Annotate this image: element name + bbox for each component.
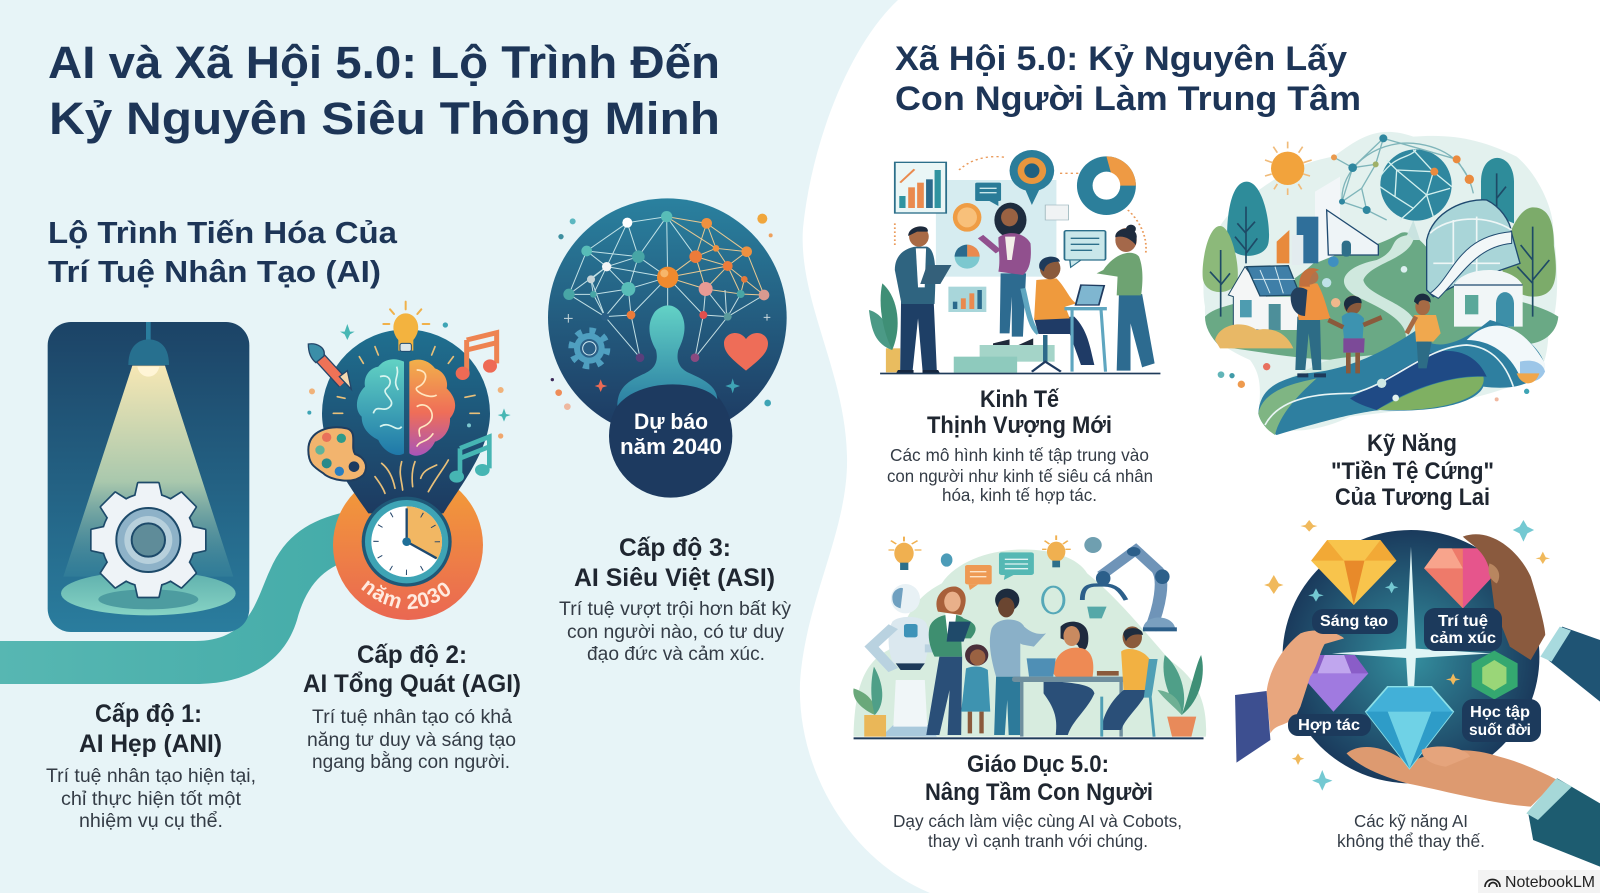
- forecast circle: [609, 374, 732, 498]
- text: education: Giáo Dục 5.0:: [967, 751, 1109, 778]
- label: năm 2030 on arc: năm 2030: [361, 580, 450, 610]
- badge: NotebookLM: NotebookLM: [1505, 874, 1595, 891]
- text: level 3: AI Siêu Việt (ASI): [574, 564, 775, 592]
- lamp: [128, 322, 169, 365]
- label: forecast 2040: Dự báo: [634, 409, 708, 434]
- illustration: level 3 ASI network head: [548, 198, 787, 498]
- teal roadmap ribbon: [0, 512, 345, 684]
- badge: NotebookLM: [1478, 870, 1600, 893]
- panel: level 1 spotlight and gear: [48, 322, 249, 632]
- spark lines: [333, 347, 479, 493]
- text: level 3: Trí tuệ vượt trội hơn bất kỳ: [559, 599, 792, 620]
- ground line: [880, 373, 1160, 374]
- skill label: Học tập suốt đời: Học tập: [1470, 704, 1530, 721]
- sparkles: [307, 322, 511, 439]
- text: future skills heading: Của Tương Lai: [1335, 484, 1490, 511]
- circular cycle icon: [1077, 156, 1136, 215]
- center sparkle: [1332, 547, 1492, 740]
- people walking: [1291, 268, 1441, 377]
- top right hand: [1463, 534, 1600, 702]
- text: economy: Các mô hình kinh tế tập trung vào: [890, 445, 1149, 465]
- icon: gear: [572, 331, 607, 366]
- gear speech bubble: [1010, 150, 1054, 205]
- text: economy: Kinh Tế: [980, 386, 1060, 413]
- icon: brain: [357, 359, 455, 456]
- skill label: Trí tuệ cảm xúc: [1424, 608, 1502, 651]
- skill label: Hợp tác: Hợp tác: [1298, 717, 1360, 734]
- river and waves: [1258, 320, 1545, 435]
- icon: orange music note: [456, 333, 497, 380]
- heading: Society 5.0: Xã Hội 5.0: Kỷ Nguyên Lấy: [895, 40, 1347, 78]
- icon: gear: [92, 483, 205, 597]
- green backdrop: [854, 549, 1206, 737]
- illustration: level 2 AGI head and clock: [307, 302, 511, 620]
- section heading: AI evolution: Trí Tuệ Nhân Tạo (AI): [48, 254, 381, 289]
- bottom right hand: [1347, 747, 1600, 867]
- light beam: [63, 366, 233, 577]
- globe network: [1331, 134, 1474, 240]
- hills: [1205, 232, 1558, 363]
- text: level 2: năng tư duy và sáng tạo: [307, 730, 516, 751]
- text: economy: [887, 386, 1153, 505]
- text: education: [893, 751, 1182, 851]
- heading: Society 5.0: Con Người Làm Trung Tâm: [895, 80, 1361, 118]
- text: level 1: nhiệm vụ cụ thể.: [79, 811, 223, 832]
- person: child: [961, 644, 990, 733]
- label: forecast 2040: năm 2040: [620, 434, 722, 459]
- orange 2030 circle: [333, 470, 483, 620]
- coin: [953, 203, 981, 232]
- plants: [853, 655, 1203, 737]
- ground line: [854, 737, 1204, 739]
- gem: green: [1472, 651, 1518, 699]
- chat bubbles: [965, 552, 1034, 590]
- lamp bulb glow: [137, 367, 159, 377]
- main title: [48, 37, 720, 144]
- chat bubble: [975, 183, 1001, 206]
- person: man with tablet: [895, 226, 952, 374]
- robot figure: [872, 584, 959, 737]
- building towers: [1277, 177, 1378, 265]
- text: level 2: ngang bằng con người.: [312, 751, 510, 773]
- solar house: [1228, 266, 1300, 330]
- text: education: Dạy cách làm việc cùng AI và Cobots,: [893, 811, 1182, 831]
- text: education: thay vì cạnh tranh với chúng.: [928, 831, 1148, 851]
- label: forecast 2040: [620, 409, 722, 459]
- text: level 2: Trí tuệ nhân tạo có khả: [312, 707, 512, 728]
- decorative dots and sparkles: [551, 214, 773, 410]
- gem: pink: [1424, 548, 1500, 608]
- section heading: AI evolution: [48, 215, 398, 289]
- text: level 3: [559, 534, 792, 665]
- skill label: Hợp tác: [1288, 714, 1371, 736]
- small chart: [948, 287, 986, 312]
- bulbs and icons: [888, 535, 1102, 570]
- text: level 3: con người nào, có tư duy: [567, 622, 784, 643]
- sun: [1265, 142, 1312, 195]
- text: future skills heading: Kỹ Năng: [1367, 430, 1457, 457]
- text: education: Nâng Tầm Con Người: [925, 779, 1153, 806]
- icon: heart: [724, 333, 768, 371]
- skill label: Trí tuệ cảm xúc: cảm xúc: [1430, 630, 1496, 647]
- table scene: [1012, 622, 1156, 737]
- skill label: Sáng tạo: Sáng tạo: [1320, 613, 1388, 630]
- illustration: future city: [1203, 132, 1558, 435]
- illustration: economy team: [869, 150, 1160, 374]
- illustration: education 5.0: [853, 535, 1206, 739]
- steps: [954, 345, 1055, 373]
- text: level 2: AI Tổng Quát (AGI): [303, 670, 521, 698]
- skill label: Sáng tạo: [1312, 609, 1398, 634]
- text: level 1: AI Hẹp (ANI): [79, 730, 222, 758]
- person: woman presenting: [981, 203, 1033, 345]
- right white panel: [800, 0, 1600, 893]
- trees: [1203, 158, 1556, 317]
- text: level 1: Cấp độ 1:: [95, 700, 202, 728]
- dome house: [1454, 270, 1523, 327]
- label: năm 2030 on arc: [361, 580, 450, 610]
- dotted connectors: [895, 157, 1146, 253]
- skill label: Học tập suốt đời: suốt đời: [1469, 722, 1531, 739]
- main title: Kỷ Nguyên Siêu Thông Minh: [49, 93, 720, 144]
- text: economy: Thịnh Vượng Mới: [927, 412, 1112, 439]
- text: skills caption: [1337, 811, 1485, 851]
- text: economy: con người như kinh tế siêu cá nhân: [887, 466, 1153, 486]
- sparkles: [1264, 520, 1550, 765]
- dark thought bubble: [322, 329, 490, 513]
- plant: [869, 283, 900, 372]
- decorative dots: [1218, 256, 1529, 401]
- gem: purple: [1299, 655, 1368, 712]
- text: future skills heading: "Tiền Tệ Cứng": [1331, 458, 1494, 485]
- heading: Society 5.0: [895, 40, 1361, 118]
- text: economy: hóa, kinh tế hợp tác.: [942, 485, 1097, 505]
- person: woman in blue: [990, 589, 1046, 735]
- text: skills caption: không thể thay thế.: [1337, 831, 1485, 851]
- skill label: Học tập suốt đời: [1462, 699, 1541, 742]
- spotlight floor: [61, 571, 236, 615]
- landscape blob: [1203, 132, 1557, 431]
- icon: light bulb: [383, 302, 429, 351]
- glass dome building: [1427, 200, 1520, 298]
- gem: orange: [1311, 540, 1396, 605]
- text: level 3: đạo đức và cảm xúc.: [587, 644, 765, 665]
- big dark circle: [548, 198, 787, 437]
- speech bubble: [1064, 231, 1106, 267]
- thumb: [1422, 747, 1470, 767]
- bush: [1215, 324, 1293, 348]
- illustration: skill gems and hands: [1235, 520, 1600, 867]
- dark sphere: [1283, 530, 1539, 783]
- text: skills caption: Các kỹ năng AI: [1354, 811, 1468, 831]
- text: level 1: Trí tuệ nhân tạo hiện tại,: [46, 766, 256, 787]
- robot arm: [1043, 547, 1177, 631]
- person: woman with bun: [1097, 225, 1155, 371]
- icon: clock: [362, 497, 452, 587]
- pie chart: [955, 245, 980, 269]
- winding road: [1265, 235, 1417, 397]
- left hand: [1235, 631, 1344, 763]
- person: woman with tablet: [926, 587, 976, 735]
- skill label: Trí tuệ cảm xúc: Trí tuệ: [1438, 613, 1488, 630]
- text: level 2: [303, 641, 521, 773]
- backdrop: [936, 180, 1056, 277]
- text: future skills heading: [1331, 430, 1494, 511]
- chart card: [895, 162, 946, 213]
- text: level 3: Cấp độ 3:: [619, 534, 731, 562]
- section heading: AI evolution: Lộ Trình Tiến Hóa Của: [48, 215, 398, 250]
- text: level 2: Cấp độ 2:: [357, 641, 467, 669]
- text: level 1: [46, 700, 256, 832]
- icon: teal music note: [449, 437, 490, 483]
- gem: blue diamond: [1366, 687, 1453, 768]
- person silhouette: [617, 305, 717, 406]
- icon: paint brush: [308, 344, 351, 389]
- note: [1045, 205, 1068, 220]
- text: level 1: chỉ thực hiện tốt một: [61, 789, 242, 810]
- person: seated at laptop: [1023, 257, 1107, 372]
- neural network: [563, 211, 769, 362]
- main title: AI và Xã Hội 5.0: Lộ Trình Đến: [48, 37, 720, 88]
- icon: palette: [308, 427, 366, 481]
